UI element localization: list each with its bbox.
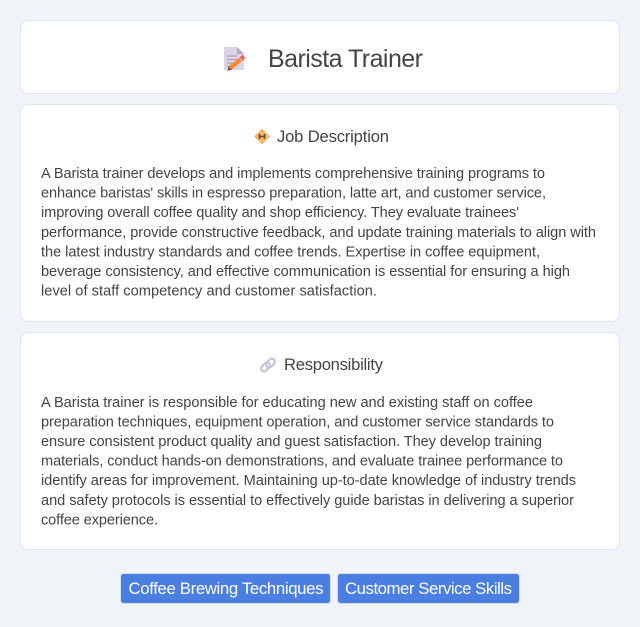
text block: job description: improving overall coffee quality and shop efficiency. They evaluate trainees' [41,205,519,221]
text block: responsibility: ensure consistent product quality and guest satisfaction. They develop training [41,434,542,450]
icon: chain link [260,357,276,373]
panel: title header [20,20,620,94]
text block: responsibility: preparation techniques, equipment operation, and customer service standards to [41,414,554,430]
text block: responsibility: and safety protocols is essential to effectively guide baristas in delivering a superior [41,493,574,509]
text block: job description [41,166,596,300]
tag: coffee brewing techniques: Coffee Brewing Techniques [128,579,324,598]
panel: responsibility [20,332,620,550]
text block: job description: enhance baristas' skills in espresso preparation, latte art, and customer service, [41,186,546,202]
text block: job description: A Barista trainer develops and implements comprehensive training programs to [41,166,545,182]
tag: customer service skills [338,574,520,604]
heading: responsibility: Responsibility [284,355,384,374]
text block: responsibility: coffee experience. [41,512,158,528]
icon: document with pencil [224,47,244,71]
text block: responsibility [41,395,576,528]
text block: responsibility: identify areas for improvement. Maintaining up-to-date knowledge of industry trends [41,473,576,489]
title: Barista Trainer [268,45,423,73]
text block: job description: the latest industry standards and coffee trends. Expertise in coffee equipment, [41,244,540,260]
text block: responsibility: materials, conduct hands-on demonstrations, and evaluate trainee performance to [41,454,563,470]
heading: job description: Job Description [277,127,389,146]
text block: job description: beverage consistency, and effective communication is essential for ensuring a high [41,264,570,280]
panel: job description [20,104,620,322]
text block: job description: level of staff competency and customer satisfaction. [41,284,377,300]
text block: job description: performance, provide constructive feedback, and update training materials to align with [41,225,596,241]
tag: customer service skills: Customer Service Skills [345,579,512,598]
tag: coffee brewing techniques [120,574,330,604]
text block: responsibility: A Barista trainer is responsible for educating new and existing staff on coffee [41,395,533,411]
icon: diamond sign [254,128,270,144]
